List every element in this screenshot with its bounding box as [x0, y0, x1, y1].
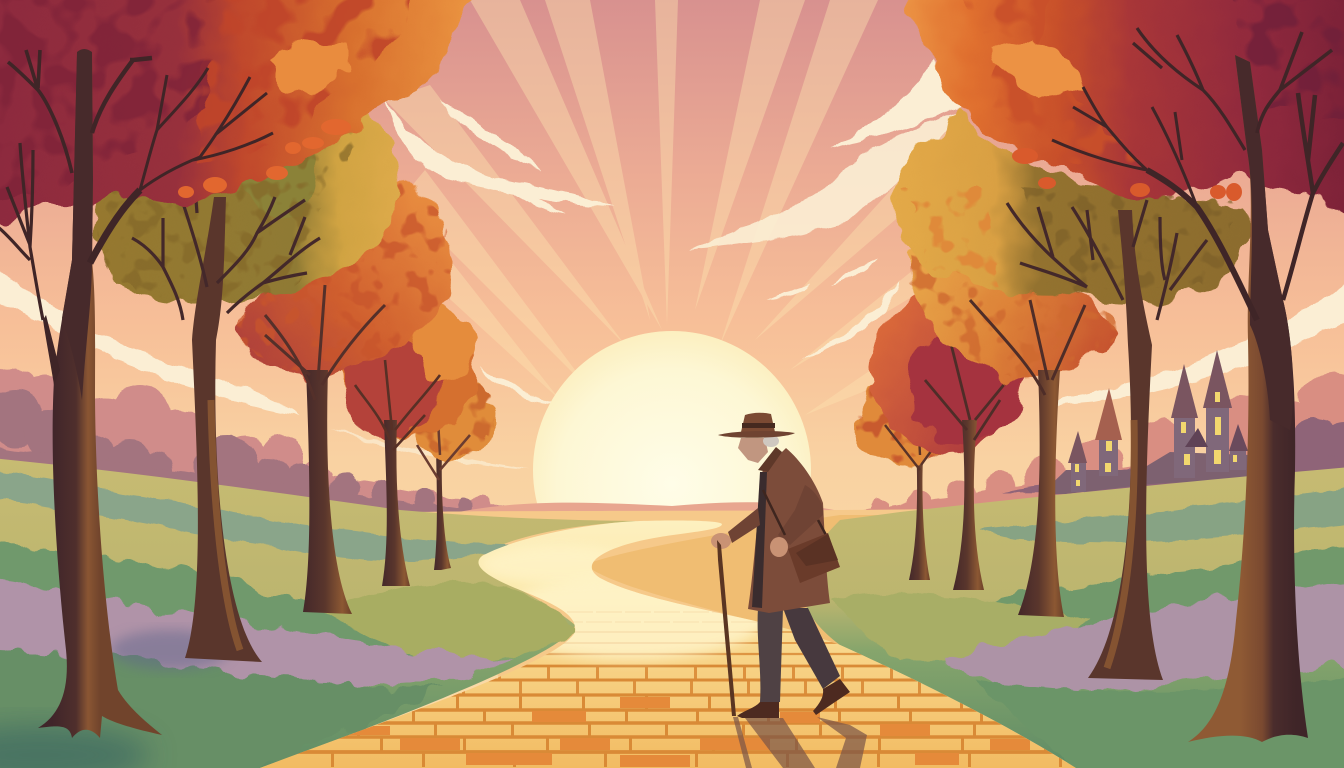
trunk: small branch foot	[43, 315, 60, 385]
tree: small far left-side tree	[408, 378, 496, 570]
tree: fourth right tree	[870, 292, 1026, 590]
road: darker bricks	[345, 697, 1030, 767]
tree: far right-side small tree	[856, 374, 956, 580]
field: right meadow	[802, 465, 1344, 768]
trunk: long diagonal limb	[1147, 170, 1257, 320]
fields	[0, 456, 1344, 768]
tree: big left trunk	[0, 49, 273, 738]
hills: left pink range	[0, 367, 540, 516]
trunk: right limb	[1283, 93, 1343, 300]
field: lower left grass	[0, 650, 440, 768]
clouds	[0, 60, 1344, 470]
right trees	[856, 0, 1344, 742]
field: blue-green band left	[0, 466, 510, 561]
traveller: hair	[763, 435, 779, 447]
trunk: diagonal limb tips	[140, 68, 273, 190]
traveller: coat	[748, 448, 830, 613]
castle: left tower	[1095, 388, 1122, 476]
traveller: arm with sleeve	[728, 508, 760, 543]
road: vertical joints	[240, 673, 1080, 760]
field: yellow mound left	[320, 581, 574, 663]
traveller: collar	[758, 447, 782, 472]
traveller: face	[738, 438, 768, 463]
traveller: front boot	[813, 679, 850, 715]
field: green band left	[0, 540, 470, 690]
castle: tall tower	[1203, 350, 1232, 472]
castle: second tower	[1171, 364, 1208, 478]
road: sun glare	[495, 576, 765, 660]
brick road	[240, 515, 1100, 768]
field: blue shadow left	[110, 630, 230, 670]
trunk: diagonal limb tips	[1052, 87, 1197, 207]
traveller: hat brim	[718, 431, 795, 438]
sun rays	[385, 0, 965, 415]
traveller: cast shadows	[733, 717, 867, 768]
trunk: upper limbs	[1257, 32, 1332, 133]
trunk: small left branch	[0, 143, 43, 320]
hills: centre pink band	[440, 502, 860, 516]
road: brick courses	[240, 612, 1080, 752]
distant hills	[0, 367, 1344, 517]
tree: big right trunk	[1052, 28, 1343, 742]
crown: orange leaf dabs	[1012, 148, 1242, 201]
sun	[533, 331, 811, 609]
tree: big right crown	[898, 0, 1344, 225]
left trees	[0, 0, 496, 738]
traveller: hat band	[742, 423, 775, 428]
field: dark corner left	[0, 725, 150, 768]
trunk: dark upper stem	[1235, 55, 1293, 430]
tree: second left tree	[92, 105, 399, 662]
tree: third right tree	[909, 240, 1118, 617]
field: lavender strip left	[0, 578, 510, 686]
field: lower right grass	[975, 675, 1344, 768]
tree: big left crown	[0, 0, 480, 232]
field: centre sand	[420, 508, 1000, 680]
field: green band right	[930, 545, 1344, 637]
field: yellow mound right	[830, 594, 1090, 661]
traveller: hand	[711, 533, 731, 549]
castle: side turret	[1229, 424, 1248, 470]
castle on the right	[1040, 350, 1258, 495]
traveller: front leg	[783, 608, 840, 689]
field: left meadow	[0, 456, 640, 768]
trunk: upper left limbs	[1133, 28, 1245, 150]
trunk: left limbs	[8, 50, 72, 173]
traveller: satchel flap	[796, 534, 838, 566]
trunk: upper right limb	[92, 58, 152, 133]
traveller: bag strap	[763, 490, 826, 535]
castle: small left tower	[1068, 431, 1087, 492]
traveller: near sleeve	[778, 485, 823, 545]
castle: wall	[1040, 452, 1258, 495]
field: right sand bank	[585, 515, 1000, 645]
field: blue-green band right	[980, 485, 1344, 543]
field: lavender strip right	[940, 578, 1344, 692]
traveller: walking cane	[717, 540, 736, 716]
traveller: hat crown	[741, 413, 775, 432]
hills: left mauve range	[0, 390, 500, 514]
traveller: coat opening	[752, 472, 767, 608]
tree: second right tree	[895, 115, 1251, 680]
traveller: rear leg	[758, 608, 783, 702]
trunk: dark upper stem	[62, 49, 93, 400]
trunk: long diagonal limb	[90, 190, 140, 263]
old traveller	[711, 413, 867, 768]
hills: right mauve range	[1000, 419, 1344, 492]
tree: fourth left tree	[340, 306, 476, 586]
crown: orange leaf dabs	[178, 119, 351, 198]
traveller: near hand	[770, 537, 788, 557]
tree: third left tree	[235, 178, 451, 614]
traveller: rear boot	[737, 702, 779, 718]
hills: right pink range	[830, 372, 1344, 517]
traveller: satchel	[788, 533, 840, 583]
